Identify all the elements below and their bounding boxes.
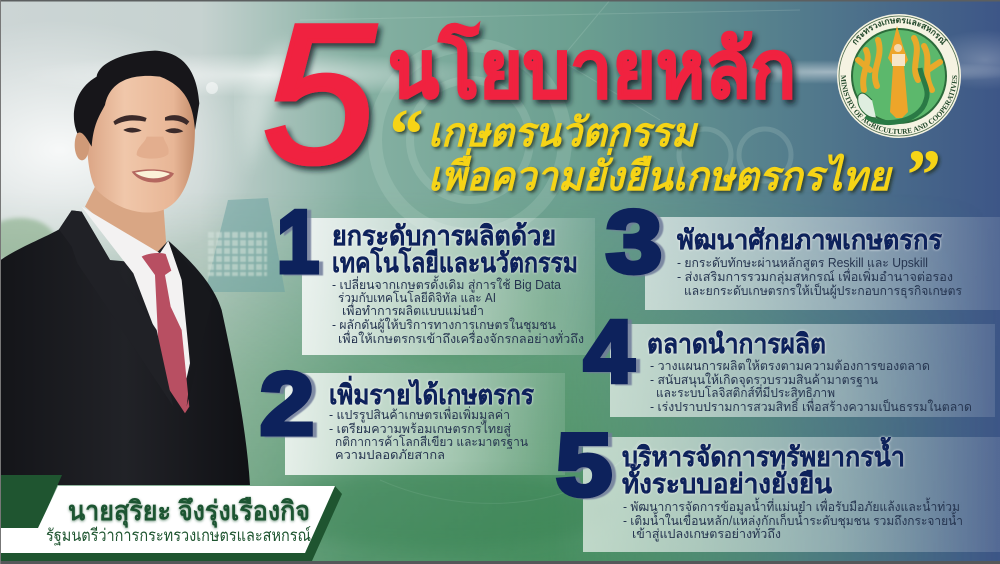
subtitle: [428, 111, 893, 199]
nose and mouth: [137, 137, 169, 159]
panel 2 text: - แปรรูปสินค้าเกษตรเพื่อเพิ่มมูลค่า: [329, 406, 510, 423]
number 1: 1: [277, 192, 319, 291]
neck: [85, 187, 167, 257]
panel 4 text: - สนับสนุนให้เกิดจุดรวบรวมสินค้ามาตรฐาน: [650, 373, 878, 388]
panel 1 text: - ผลักดันผู้ให้บริการทางการเกษตรในชุมชน: [332, 318, 556, 333]
ear: [75, 130, 89, 160]
panel 3 text: และยกระดับเกษตรกรให้เป็นผู้ประกอบการธุรกิจเกษตร: [684, 283, 962, 299]
panel 2 text: ความปลอดภัยสากล: [335, 448, 445, 462]
minister name: นายสุริยะ จึงรุ่งเรืองกิจ: [68, 496, 310, 528]
panel 4: market-led production: [584, 302, 995, 417]
ministry logo: กระทรวงเกษตรและสหกรณ์: [852, 18, 948, 45]
panel 5 text: - เติมน้ำในเขื่อนหลัก/แหล่งกักเก็บน้ำระดับชุมชน รวมถึงกระจายน้ำ: [623, 511, 963, 529]
face: [87, 72, 195, 213]
panel 3 text: [677, 256, 962, 299]
panel background: [645, 217, 1000, 310]
panel 5 heading: บริหารจัดการทรัพยากรน้ำ: [622, 436, 905, 472]
portrait: minister in suit: [1, 51, 250, 485]
panel 3 text: - ส่งเสริมการรวมกลุ่มสหกรณ์ เพื่อเพิ่มอำนาจต่อรอง: [677, 268, 953, 285]
ministry logo: MINISTRY OF AGRICULTURE AND COOPERATIVES: [840, 75, 958, 134]
title: main policies: นโยบายหลัก: [388, 22, 796, 114]
panel 5 text: [623, 497, 963, 542]
panel 2 text: กติกาการค้าโลกสีเขียว และมาตรฐาน: [335, 434, 528, 449]
shirt: [82, 207, 190, 400]
panel 1 text: เพื่อทำการผลิตแบบแม่นยำ: [342, 302, 484, 318]
panel 1 heading: [332, 221, 578, 278]
panel 4 heading: ตลาดนำการผลิต: [647, 329, 826, 359]
panel 3: farmer potential: [606, 192, 1000, 310]
name banner: [0, 475, 342, 561]
panel 5: water management: [556, 415, 1000, 552]
panel 4 text: และระบบโลจิสติกส์ที่มีประสิทธิภาพ: [656, 384, 835, 400]
suit jacket: [1, 210, 250, 485]
panel 3 heading: พัฒนาศักยภาพเกษตรกร: [677, 225, 942, 255]
panel 4 text: - วางแผนการผลิตให้ตรงตามความต้องการของตลาด: [650, 359, 930, 373]
panel 4 text: [650, 359, 972, 414]
panel 2 heading: เพิ่มรายได้เกษตรกร: [329, 375, 534, 410]
opening quote mark: “: [386, 94, 422, 174]
number 2: 2: [260, 354, 314, 453]
number 5: 5: [556, 415, 612, 514]
panel 1 text: - เปลี่ยนจากเกษตรดั้งเดิม สู่การใช้ Big Data: [332, 275, 561, 293]
panel 1 text: [332, 275, 584, 346]
necktie: [142, 253, 189, 413]
panel 1 text: เพื่อให้เกษตรกรเข้าถึงเครื่องจักรกลอย่างทั่วถึง: [338, 330, 584, 346]
subtitle: เพื่อความยั่งยืนเกษตรกรไทย: [428, 148, 893, 199]
panel 2 text: - เตรียมความพร้อมเกษตรกรไทยสู่: [329, 422, 511, 437]
panel 1 heading: ยกระดับการผลิตด้วย: [332, 221, 556, 251]
minister position: รัฐมนตรีว่าการกระทรวงเกษตรและสหกรณ์: [46, 526, 311, 546]
panel 5 heading: ทั้งระบบอย่างยั่งยืน: [622, 463, 833, 499]
panel 4 text: - เร่งปราบปรามการสวมสิทธิ์ เพื่อสร้างความเป็นธรรมในตลาด: [650, 397, 972, 414]
panel 3 text: - ยกระดับทักษะผ่านหลักสูตร Reskill และ Upskill: [677, 256, 928, 271]
hair: [74, 51, 199, 147]
panel background: [302, 218, 595, 355]
brows and eyes: [113, 115, 189, 133]
tablet graphic: [205, 198, 285, 292]
panel 2: farmer income: [260, 354, 565, 475]
panel background: [610, 324, 995, 417]
panel 5 text: - พัฒนาการจัดการข้อมูลน้ำที่แม่นยำ เพื่อรับมือภัยแล้งและน้ำท่วม: [623, 497, 960, 515]
panel background: [583, 437, 1000, 552]
panel 1: production: [277, 192, 595, 355]
panel 2 text: [329, 406, 528, 462]
panel 5 heading: [622, 436, 905, 499]
subtitle: เกษตรนวัตกรรม: [428, 111, 699, 155]
panel 1 heading: เทคโนโลยีและนวัตกรรม: [332, 246, 578, 278]
panel background: [285, 373, 565, 475]
panel 5 text: เข้าสู่แปลงเกษตรอย่างทั่วถึง: [632, 525, 781, 542]
number 3: 3: [606, 192, 662, 291]
jacket lapel: [59, 210, 173, 407]
panel 1 text: ร่วมกับเทคโนโลยีดิจิทัล และ AI: [338, 290, 496, 305]
number 4: 4: [584, 302, 634, 401]
ministry logo: [837, 14, 961, 138]
closing quote mark: ”: [903, 135, 939, 215]
